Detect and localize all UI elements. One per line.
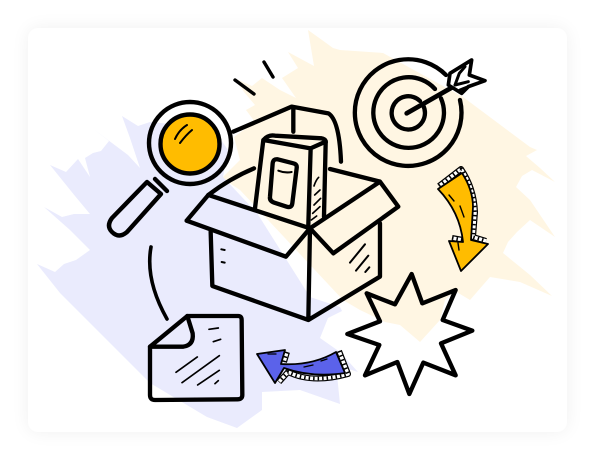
icon: starburst <box>347 274 472 394</box>
brush: blue <box>37 116 358 428</box>
panel: card <box>28 28 567 432</box>
curved line <box>150 247 167 319</box>
brush: yellow <box>222 30 555 342</box>
box body <box>211 223 380 320</box>
icon: document <box>150 316 242 400</box>
lens <box>160 114 220 174</box>
arrow: yellow <box>438 169 488 271</box>
box flaps <box>187 168 254 221</box>
arrow: blue <box>257 350 348 383</box>
icon: open box <box>187 107 398 320</box>
icon: magnifying glass <box>109 102 231 236</box>
handle <box>109 179 167 236</box>
icon: target with arrow <box>355 59 485 166</box>
product carton <box>255 135 326 225</box>
motion lines <box>235 62 273 94</box>
